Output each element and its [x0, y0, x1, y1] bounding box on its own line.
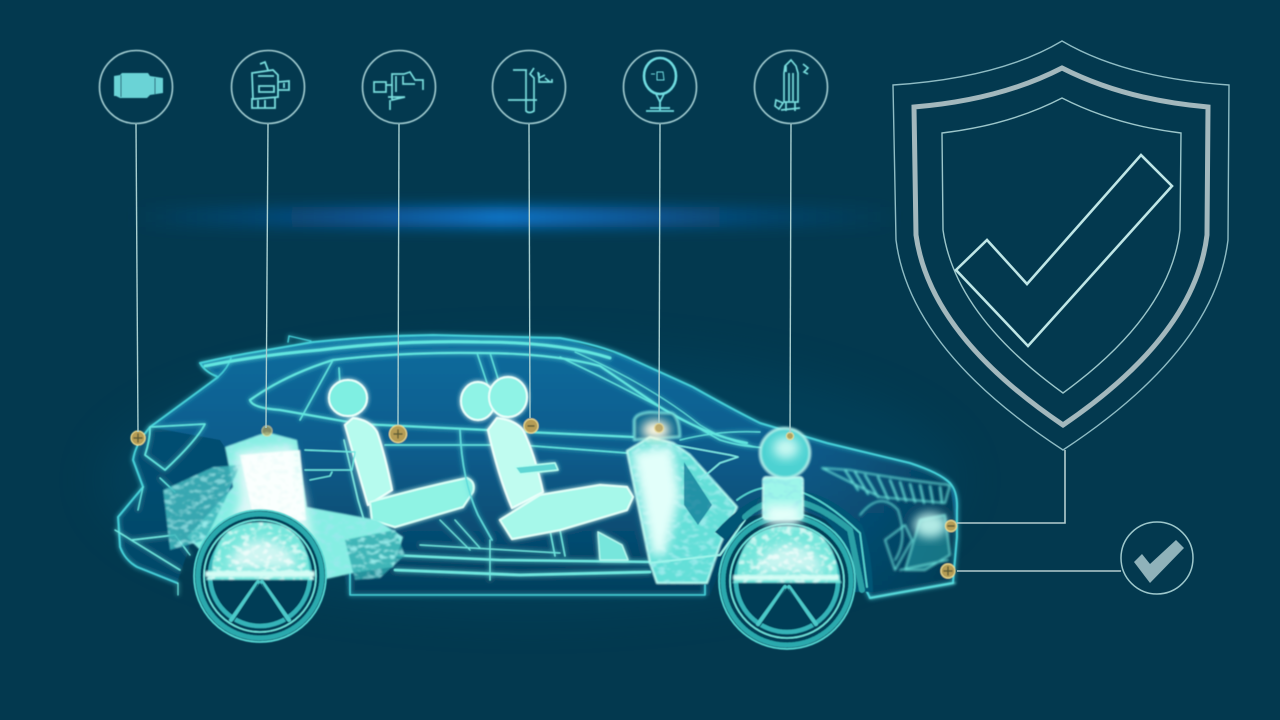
front seat and strut block [627, 412, 745, 583]
rear wheel [194, 510, 326, 642]
shield thick band [914, 68, 1208, 425]
front wheel [715, 487, 873, 649]
part icon: steering linkage [362, 50, 436, 124]
part icon: mirror [624, 50, 696, 124]
front fender shade [760, 423, 957, 598]
car wireframe [115, 335, 957, 649]
rear seat [329, 380, 474, 560]
part icon: brake cylinder [100, 50, 172, 124]
rear seat headrest [329, 380, 367, 416]
rear suspension block [163, 432, 405, 585]
body outline [118, 335, 957, 598]
seat backrest [488, 418, 543, 508]
shield inner outline [942, 98, 1181, 393]
seat cushion [500, 485, 633, 539]
part icon: shock absorber [754, 50, 828, 124]
rear hatch shade [118, 427, 240, 583]
rear seat backrest [345, 418, 392, 505]
front lamp glow [913, 512, 947, 538]
front hub texture [732, 526, 842, 583]
icon: check mark [956, 155, 1172, 346]
front passenger seat [460, 377, 633, 560]
front seat body [627, 437, 737, 583]
front seat headrest [634, 412, 680, 440]
part icon: gear lever [492, 50, 566, 124]
gold sensor nodes [131, 419, 956, 578]
car body fill [118, 335, 957, 598]
part icon: pedal assembly [232, 50, 304, 124]
roof and window lines [138, 342, 790, 510]
seat headrests [461, 382, 495, 420]
sill and floor lines [115, 520, 655, 595]
ambient glow behind car [100, 350, 960, 610]
shield [893, 41, 1229, 450]
blue light band [130, 207, 900, 227]
rear hub texture [205, 522, 315, 580]
shield outer outline [893, 41, 1229, 450]
connector: lamp to badge [957, 570, 1121, 572]
front grille and headlight [822, 468, 955, 598]
rear seat cushion [370, 478, 474, 527]
check badge [1121, 522, 1193, 594]
front strut with sphere [760, 428, 810, 525]
callout lines to icons [136, 124, 791, 433]
connector: shield to headlight [957, 450, 1065, 523]
